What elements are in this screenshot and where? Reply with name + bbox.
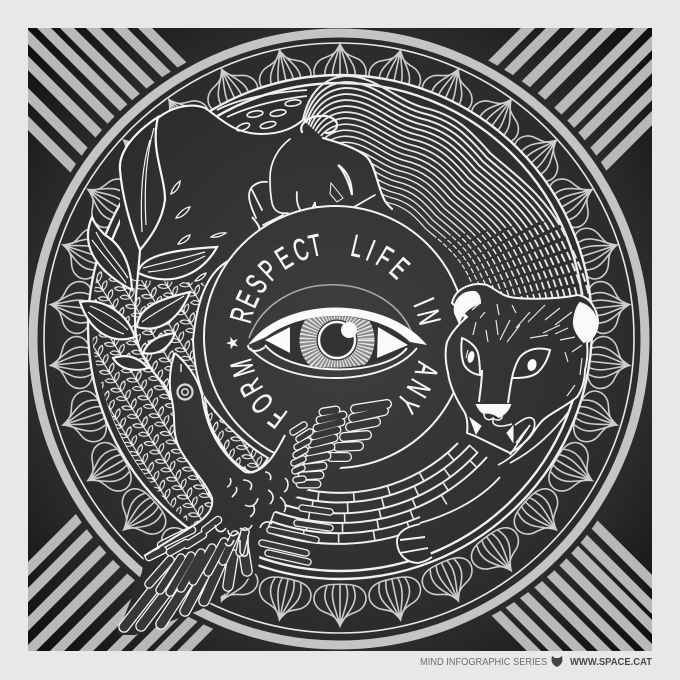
circular motto: ★ (224, 337, 240, 350)
circular motto: Y (390, 387, 424, 419)
eye: opening (258, 316, 412, 368)
spotted cloth (217, 90, 307, 132)
circular motto: N (410, 307, 446, 328)
footer credits (420, 656, 653, 668)
eye: pupil (319, 322, 355, 358)
hair: broken strands (436, 219, 590, 300)
ferret: nose (477, 405, 510, 417)
ferret body: stripes (268, 442, 500, 544)
circular motto: E (270, 241, 299, 277)
circular motto: L (348, 229, 366, 265)
hair: continuous strands (302, 76, 558, 238)
circular motto: R (225, 304, 261, 326)
icon: cat logo (552, 656, 562, 667)
onion border (48, 44, 632, 626)
stripes: bottom left (28, 514, 214, 651)
stripes: top right (488, 28, 652, 171)
ferret: ears (455, 292, 480, 322)
leaf: top (120, 117, 165, 250)
ferret body: brick ticks (268, 442, 482, 538)
ferret: hand (498, 417, 535, 465)
ferret head (446, 284, 598, 465)
leaf: middle right (137, 292, 190, 329)
circular motto (224, 229, 446, 434)
stripes: bottom right (492, 520, 652, 651)
foliage beside neck (205, 398, 268, 472)
circular motto: I (406, 294, 440, 312)
branch with leaves (80, 117, 226, 400)
flowing hair (303, 76, 590, 312)
circular motto: R (234, 373, 270, 401)
bird body (117, 353, 392, 635)
stripes: top left (28, 28, 186, 172)
ferret: leg line (510, 410, 570, 463)
circular motto: O (245, 386, 280, 419)
eye: lower lids (248, 345, 417, 378)
leaf: upper left (88, 217, 132, 290)
bird: left wing feathers (124, 520, 247, 627)
circular motto: A (408, 358, 444, 381)
ferret: snout (479, 370, 512, 403)
bird: eye (178, 364, 192, 400)
eye: iris (308, 311, 366, 369)
eye: brow (249, 285, 414, 338)
central eye (248, 285, 427, 378)
leaf: lower right (143, 333, 175, 354)
circular motto: P (253, 254, 285, 287)
woman: shoulder line (158, 106, 305, 134)
inner figure ring (88, 75, 592, 579)
bird: outline (144, 353, 285, 556)
bird: breast scales (215, 472, 288, 556)
text circle (204, 206, 466, 468)
circular motto: E (383, 252, 415, 286)
ferret: left eye (461, 338, 480, 375)
ferret: teeth (470, 418, 513, 442)
woman: arm edge (193, 217, 260, 395)
ferret: right eye (512, 348, 550, 378)
circular motto: F (371, 241, 398, 275)
circular motto: I (362, 235, 379, 268)
ferret paw (397, 524, 432, 563)
foliage behind branch (92, 262, 213, 525)
eye: sclera (265, 327, 408, 358)
eye: upper lid (248, 308, 427, 345)
circular motto: M (225, 355, 262, 380)
circular motto: N (400, 373, 436, 402)
woman: head (249, 116, 392, 225)
leaf: lower left (113, 356, 148, 370)
branch stem (135, 250, 170, 400)
ferret: fur marks (466, 303, 582, 396)
bird: right wing feathers (262, 404, 387, 562)
thin ring (44, 43, 634, 633)
leaf: middle left (80, 301, 135, 339)
circular motto: C (289, 232, 314, 269)
medallion disc (70, 60, 606, 629)
leaf: upper right (138, 247, 217, 279)
footer: series label: MIND INFOGRAPHIC SERIES (420, 656, 547, 668)
second inner ring (96, 83, 584, 571)
circular motto: T (306, 229, 325, 264)
seed leaves (171, 181, 226, 281)
footer: website: WWW.SPACE.CAT (570, 656, 653, 668)
woman: body silhouette (120, 106, 392, 340)
circular motto: E (230, 287, 266, 313)
eye: highlight (341, 322, 357, 338)
circular motto: S (240, 269, 275, 299)
circular motto: F (263, 400, 293, 434)
